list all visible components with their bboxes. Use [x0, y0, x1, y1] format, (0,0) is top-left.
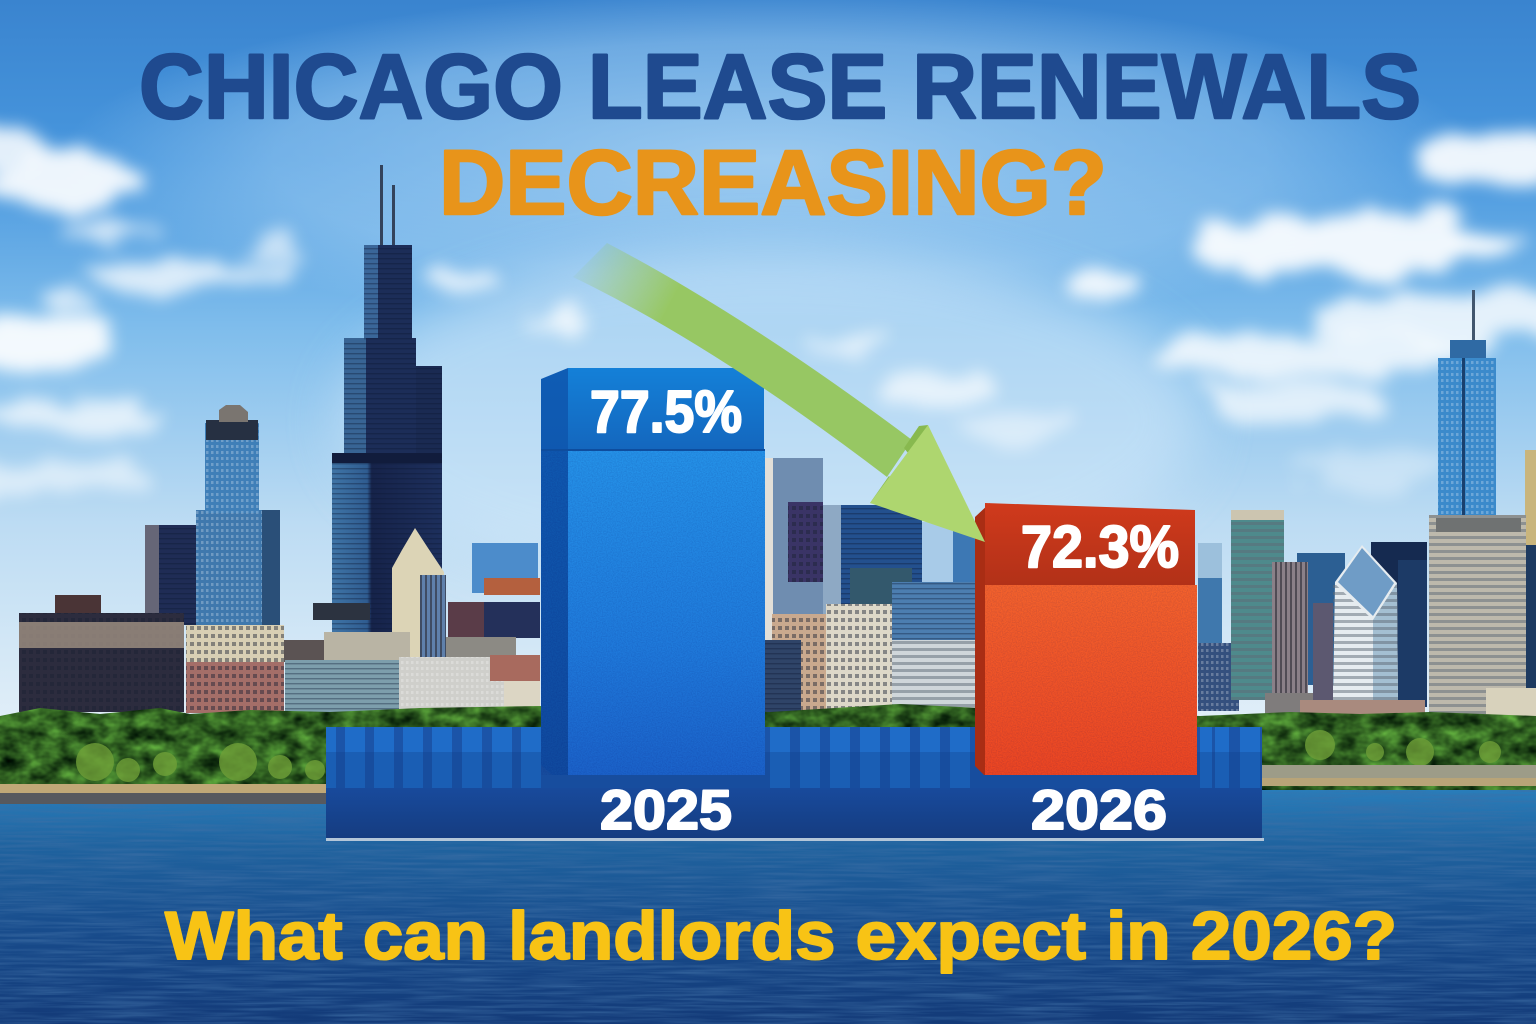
right shoreline [1262, 765, 1536, 778]
clouds [0, 119, 1536, 500]
centre buildings [765, 458, 975, 714]
left shoreline [0, 784, 326, 793]
Willis Tower [313, 165, 442, 633]
bar: 2026 [975, 503, 1197, 775]
year label: 2025: 2025 [600, 778, 732, 841]
mid buildings [285, 528, 540, 718]
bar: 2025 [541, 368, 765, 775]
value label: 77.5%: 77.5% [590, 379, 742, 445]
arrow: downward trend [573, 243, 985, 542]
skyline [0, 165, 1536, 804]
title line 1: CHICAGO LEASE RENEWALS [139, 36, 1421, 138]
question text: What can landlords expect in 2026? [165, 898, 1397, 974]
chart base platform [326, 727, 1264, 841]
water [0, 786, 1536, 1024]
left buildings [19, 405, 324, 713]
sky background [0, 0, 1536, 730]
title [139, 36, 1421, 234]
year label: 2026: 2026 [1031, 778, 1167, 841]
value label: 72.3%: 72.3% [1021, 514, 1179, 580]
chart [326, 368, 1264, 841]
title line 2: DECREASING? [439, 132, 1107, 234]
tree line [0, 704, 1536, 804]
right buildings [1198, 290, 1536, 718]
